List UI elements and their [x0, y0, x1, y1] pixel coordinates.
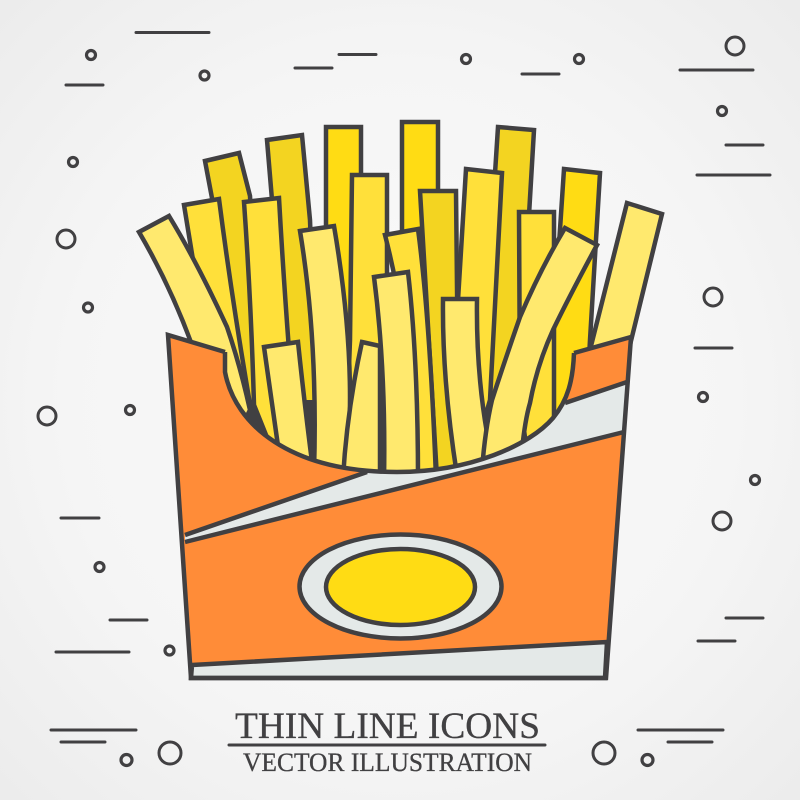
- fries: middle row: [184, 169, 554, 480]
- caption rule: [229, 744, 545, 746]
- caption: [229, 706, 545, 777]
- oval label: outer ring: [300, 534, 502, 638]
- caption heading: THIN LINE ICONS: [235, 706, 540, 747]
- box: outline: [168, 335, 631, 678]
- fries: dark gaps between bases: [240, 400, 530, 480]
- fries box: orange body: [168, 335, 631, 678]
- fries: front row: [139, 203, 662, 480]
- box: opening edge: [225, 352, 574, 472]
- box: grey diagonal band: [185, 382, 627, 542]
- illustration: french fries in box: [139, 122, 662, 678]
- box: grey band edges: [185, 382, 627, 542]
- box: bottom grey strip: [191, 642, 607, 678]
- decorative dashes: [51, 32, 770, 742]
- caption subheading: VECTOR ILLUSTRATION: [243, 748, 532, 777]
- fries: back row: [205, 122, 600, 440]
- oval label: yellow centre: [326, 549, 475, 625]
